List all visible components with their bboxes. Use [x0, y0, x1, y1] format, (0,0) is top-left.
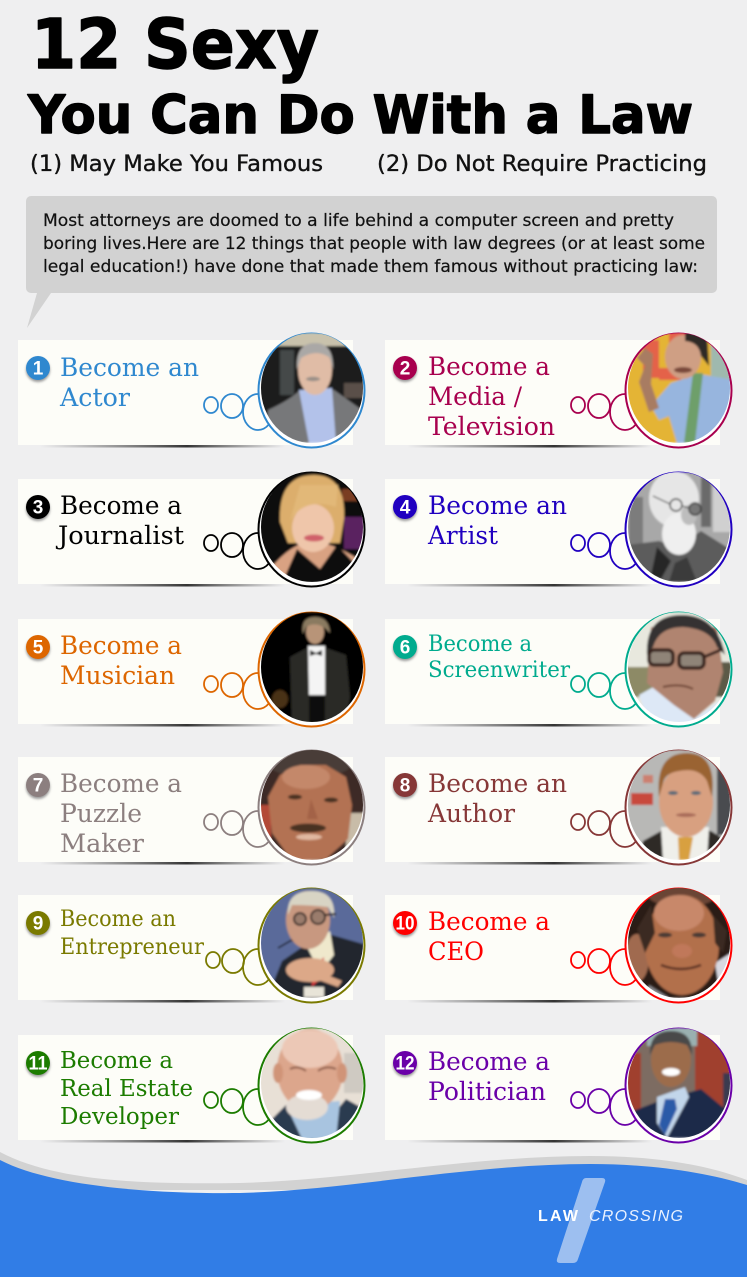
logo: CROSSING	[589, 1208, 683, 1225]
card 5: musician	[18, 612, 367, 727]
ring 7	[258, 750, 364, 864]
title: 12 Sexy	[31, 5, 319, 85]
footer wave	[0, 1152, 747, 1277]
badge 12: 12	[396, 1054, 414, 1074]
title: You Can Do With a Law	[27, 85, 693, 146]
thought bubbles 2	[571, 394, 640, 430]
label 1: Become an	[60, 353, 199, 382]
card 3: journalist	[18, 472, 367, 586]
badge 7	[26, 773, 50, 799]
badge 2: 2	[400, 358, 410, 380]
badge 2	[393, 356, 417, 382]
label 5: Become a	[60, 631, 182, 660]
label 6: Become a	[428, 632, 532, 657]
thought bubbles 7	[204, 811, 273, 847]
badge 5: 5	[33, 638, 44, 658]
badge 1: 1	[33, 358, 44, 380]
portrait 12	[624, 1028, 735, 1138]
card 8: author	[385, 750, 735, 864]
logo	[538, 1178, 683, 1263]
badge 4: 4	[400, 498, 411, 518]
label 9: Become an	[60, 907, 176, 932]
label 5: Musician	[60, 661, 175, 690]
ring 4	[626, 472, 732, 586]
thought bubbles 5	[204, 673, 273, 709]
ring 3	[258, 472, 364, 586]
label 8: Author	[427, 799, 515, 828]
subtitle	[30, 151, 707, 177]
card 7: puzzle maker	[18, 738, 368, 864]
speech bubble intro: boring lives.Here are 12 things that people with law degrees (or at least some	[43, 234, 705, 254]
label 7: Become a	[60, 769, 182, 798]
title	[27, 5, 693, 146]
card 10: ceo	[385, 883, 734, 1002]
label 2: Media /	[428, 382, 523, 411]
label 3: Become a	[60, 491, 182, 520]
badge 4	[393, 495, 417, 521]
thought bubbles 10	[571, 949, 640, 985]
thought bubbles 4	[571, 533, 640, 569]
badge 3: 3	[33, 498, 43, 518]
speech bubble intro: Most attorneys are doomed to a life behind a computer screen and pretty	[43, 211, 674, 231]
ring 9	[258, 888, 364, 1002]
portrait 8	[624, 750, 735, 860]
label 11: Real Estate	[60, 1074, 193, 1102]
label 12: Politician	[428, 1077, 546, 1106]
ring 12	[626, 1028, 732, 1142]
speech bubble intro: legal education!) have done that made them famous without practicing law:	[43, 257, 698, 277]
ring 6	[626, 612, 732, 726]
label 9: Entrepreneur	[60, 935, 204, 960]
label 2: Become a	[428, 352, 550, 381]
card 2: media / television	[385, 333, 736, 448]
badge 10: 10	[396, 914, 414, 934]
thought bubbles 3	[204, 533, 273, 569]
badge 6	[393, 635, 417, 661]
thought bubbles 1	[204, 394, 273, 430]
card 1: actor	[18, 333, 367, 448]
badge 9: 9	[33, 914, 43, 934]
label 7: Maker	[60, 829, 144, 858]
badge 7: 7	[33, 776, 43, 796]
thought bubbles 8	[571, 811, 640, 847]
card 4: artist	[385, 471, 734, 586]
badge 9	[26, 911, 50, 937]
thought bubbles 12	[571, 1089, 640, 1125]
subtitle: (2) Do Not Require Practicing	[377, 151, 707, 177]
portrait 4	[624, 471, 734, 582]
portrait 10	[628, 888, 730, 998]
thought bubbles 9	[206, 949, 273, 985]
thought bubbles 6	[571, 673, 640, 709]
label 8: Become an	[428, 769, 567, 798]
card 12: politician	[385, 1028, 735, 1142]
portrait 6	[624, 612, 734, 725]
badge 5	[26, 635, 50, 661]
label 11: Become a	[60, 1046, 173, 1074]
label 10: Become a	[428, 907, 550, 936]
card 11: real estate developer	[18, 1028, 367, 1142]
badge 8: 8	[400, 776, 410, 796]
badge 11: 11	[28, 1054, 48, 1074]
label 4: Become an	[428, 491, 567, 520]
badge 11	[26, 1051, 50, 1077]
label 11: Developer	[60, 1102, 180, 1130]
label 10: CEO	[428, 937, 484, 966]
badge 6: 6	[400, 638, 410, 658]
portrait 7	[261, 750, 363, 860]
subtitle: (1) May Make You Famous	[30, 151, 323, 177]
portrait 2	[624, 333, 736, 443]
portrait 1	[257, 333, 367, 443]
ring 5	[258, 612, 364, 726]
ring 10	[626, 888, 732, 1002]
badge 8	[393, 773, 417, 799]
speech bubble intro	[26, 196, 717, 328]
ring 8	[626, 750, 732, 864]
logo: LAW	[538, 1208, 579, 1225]
card 9: entrepreneur	[18, 888, 367, 1002]
label 7: Puzzle	[60, 799, 142, 828]
label 1: Actor	[59, 383, 130, 412]
portrait 11	[257, 1028, 367, 1141]
label 2: Television	[428, 412, 555, 441]
portrait 3	[257, 472, 367, 583]
thought bubbles 11	[204, 1089, 273, 1125]
ring 11	[258, 1028, 364, 1142]
label 12: Become a	[428, 1047, 550, 1076]
label 6: Screenwriter	[428, 658, 570, 683]
ring 2	[626, 334, 732, 448]
portrait 5	[261, 612, 363, 722]
badge 1	[26, 356, 50, 382]
label 4: Artist	[427, 521, 498, 550]
card 6: screenwriter	[385, 612, 734, 726]
badge 3	[26, 495, 50, 521]
portrait 9	[257, 888, 367, 998]
label 3: Journalist	[55, 521, 184, 550]
ring 1	[258, 334, 364, 448]
